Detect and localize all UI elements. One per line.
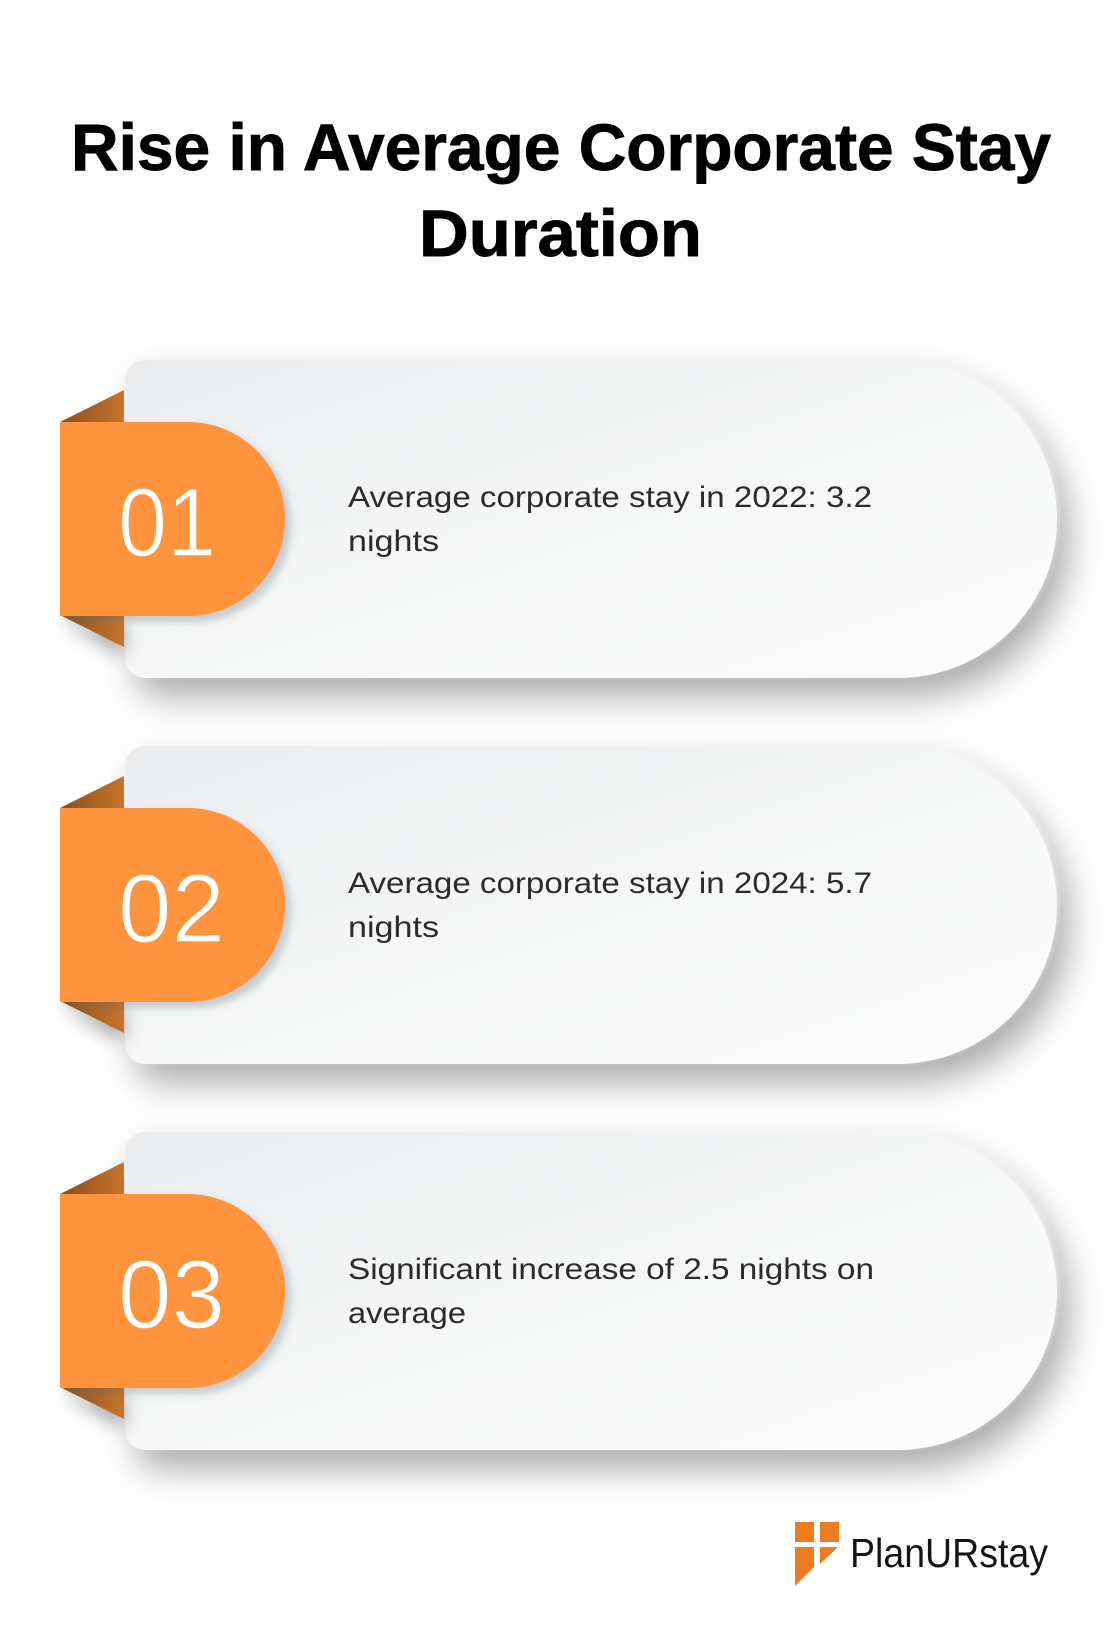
fold bottom (60, 1001, 124, 1033)
fold shadow (62, 1008, 124, 1042)
card (125, 1132, 1057, 1450)
card (125, 746, 1057, 1064)
fold bottom (60, 615, 124, 647)
description: nights (348, 525, 439, 558)
badge (60, 808, 285, 1002)
badge shadow (66, 814, 291, 1008)
card shadow (137, 1150, 1069, 1468)
card (125, 360, 1057, 678)
logo: PlanURstay (795, 1522, 1048, 1586)
description (348, 867, 872, 944)
description: nights (348, 911, 439, 944)
description (348, 481, 872, 558)
panel: step 02 (60, 742, 1069, 1082)
card shadow (137, 378, 1069, 696)
wordmark: PlanURstay (850, 1530, 1048, 1576)
description: Average corporate stay in 2024: 5.7 (348, 867, 872, 900)
badge shadow (66, 428, 291, 622)
fold top (60, 1162, 124, 1195)
icon: logo mark (795, 1522, 839, 1586)
panel: step 03 (60, 1128, 1069, 1468)
number: 03 (118, 1240, 225, 1349)
description: Average corporate stay in 2022: 3.2 (348, 481, 872, 514)
title: Rise in Average Corporate Stay (71, 110, 1051, 184)
fold bottom (60, 1387, 124, 1419)
number: 01 (118, 468, 216, 577)
card highlight (145, 1128, 1057, 1446)
number: 02 (118, 854, 225, 963)
title (71, 110, 1051, 270)
badge (60, 1194, 285, 1388)
badge shadow (66, 1200, 291, 1394)
panel: step 01 (60, 356, 1069, 696)
card highlight (145, 356, 1057, 674)
fold shadow (62, 1394, 124, 1428)
description: average (348, 1297, 466, 1330)
title: Duration (419, 196, 702, 270)
description (348, 1253, 874, 1330)
description: Significant increase of 2.5 nights on (348, 1253, 874, 1286)
card shadow (137, 764, 1069, 1082)
fold top (60, 390, 124, 423)
badge (60, 422, 285, 616)
fold shadow (62, 622, 124, 656)
card highlight (145, 742, 1057, 1060)
fold top (60, 776, 124, 809)
